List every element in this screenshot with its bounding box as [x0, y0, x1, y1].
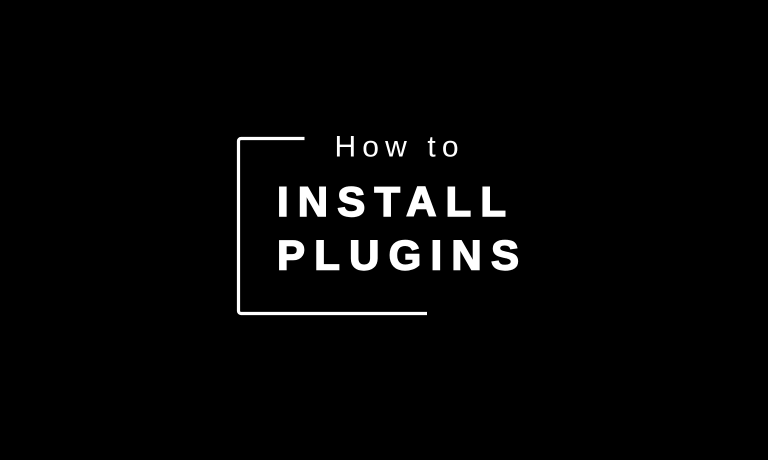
heading: PLUGINS: PLUGINS [277, 232, 519, 278]
heading: How to: How to [334, 130, 458, 164]
heading: INSTALL: INSTALL [277, 178, 506, 225]
bracket frame [238, 138, 427, 314]
